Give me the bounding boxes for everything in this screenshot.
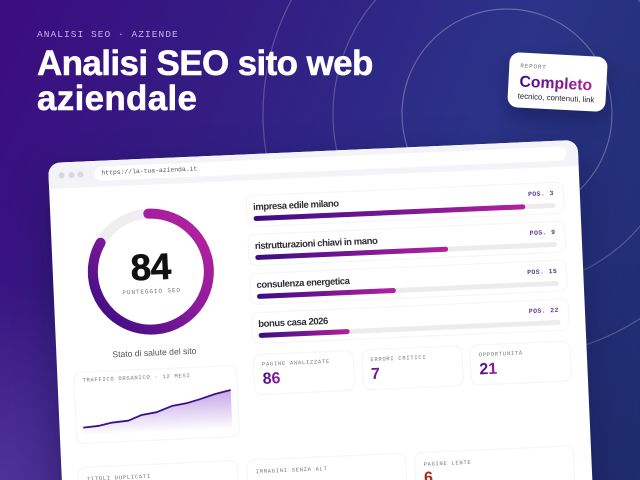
badge description: tecnico, contenuti, link: [517, 91, 595, 104]
keyword row: ristrutturazioni chiavi in mano: POS. 9: [530, 229, 556, 237]
panel: organic traffic chart: [73, 365, 240, 444]
stat card: immagini senza alt: IMMAGINI SENZA ALT: [256, 465, 328, 475]
stat card: errori critici: 7: [371, 366, 380, 383]
stat card: errori critici: [361, 345, 464, 390]
gauge: SEO score 84: [88, 208, 214, 335]
window dots: [58, 172, 84, 178]
stat card: pagine lente: PAGINE LENTE: [423, 459, 472, 468]
keyword row: impresa edile milano: impresa edile milano: [253, 198, 339, 213]
badge label: REPORT: [520, 63, 547, 71]
keyword row: bonus casa 2026: [251, 298, 570, 344]
stat card: errori critici: ERRORI CRITICI: [370, 354, 426, 363]
gauge: SEO score 84: 84: [130, 246, 173, 288]
browser title bar: [48, 140, 579, 189]
gauge caption: Stato di salute del sito: [112, 345, 197, 359]
url bar: [94, 146, 566, 181]
eyebrow label: ANALISI SEO · AZIENDE: [37, 29, 179, 40]
chart label: TRAFFICO ORGANICO · 12 MESI: [82, 372, 191, 384]
title: [37, 44, 373, 118]
keyword row: bonus casa 2026: POS. 22: [529, 307, 559, 315]
keyword row: impresa edile milano: [246, 182, 565, 227]
badge value: Completo: [519, 74, 593, 94]
browser window panel: [48, 140, 596, 480]
title: Analisi SEO sito web: [37, 44, 373, 83]
keyword row: ristrutturazioni chiavi in mano: [247, 221, 566, 266]
stat card: opportunita: [469, 340, 572, 386]
stat card: pagine lente: [414, 445, 576, 480]
stat card: opportunita: OPPORTUNITÀ: [479, 349, 523, 358]
url bar: https://la-tua-azienda.it: [101, 165, 197, 177]
keyword row: consulenza energetica: [249, 259, 568, 305]
stat card: opportunita: 21: [479, 361, 498, 378]
keyword row: impresa edile milano: POS. 3: [528, 190, 554, 198]
keyword row: ristrutturazioni chiavi in mano: ristrutturazioni chiavi in mano: [255, 236, 378, 252]
keyword row: consulenza energetica: consulenza energetica: [256, 276, 350, 291]
stat card: immagini senza alt: [246, 453, 409, 480]
report badge: [507, 52, 608, 112]
keyword row: consulenza energetica: POS. 15: [527, 268, 557, 276]
keyword row: bonus casa 2026: bonus casa 2026: [258, 316, 328, 330]
stat card: titoli duplicati: [77, 460, 240, 480]
stat card: pagine analizzate: 86: [262, 370, 281, 388]
stat card: pagine analizzate: PAGINE ANALIZZATE: [262, 358, 330, 368]
gauge: SEO score 84: PUNTEGGIO SEO: [122, 287, 181, 296]
title: aziendale: [37, 79, 197, 118]
stat card: pagine analizzate: [253, 350, 355, 395]
line chart: [83, 389, 232, 432]
